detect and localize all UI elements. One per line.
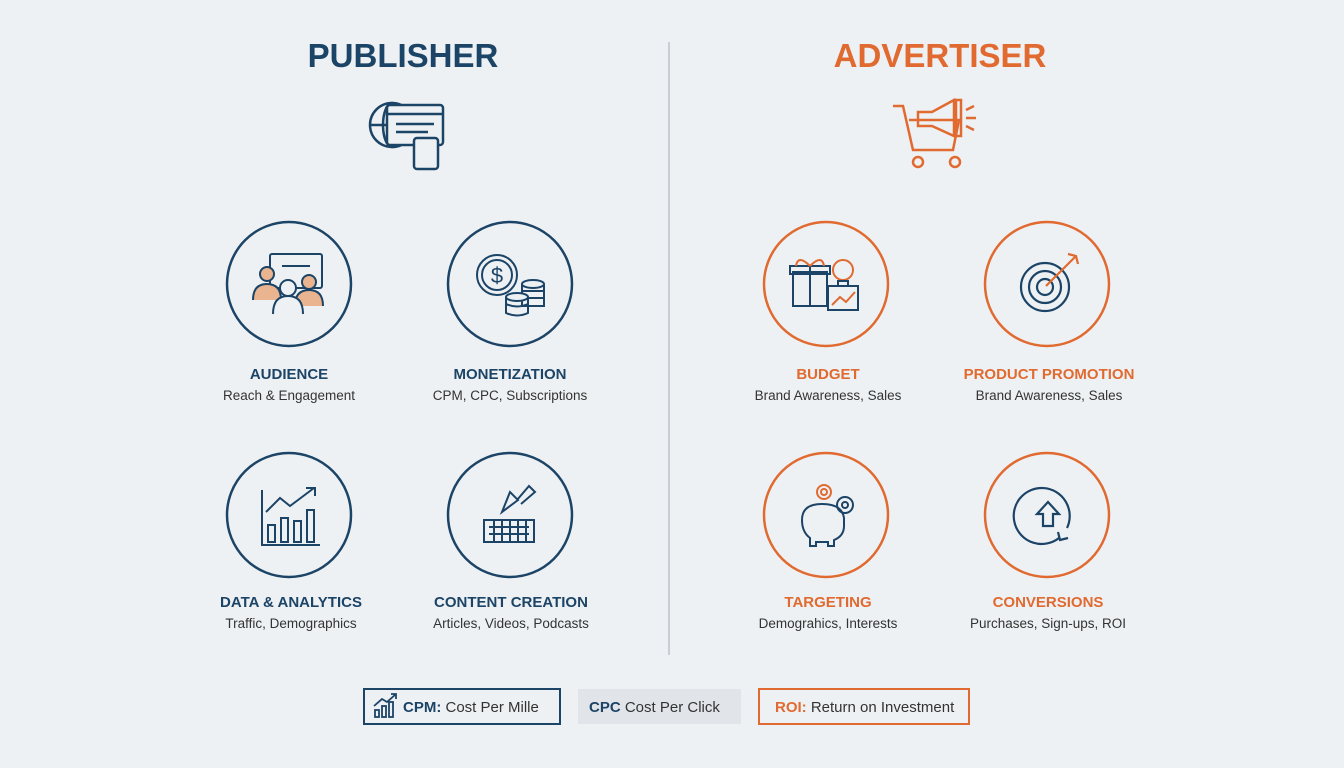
panel: conversions: CONVERSIONS (993, 594, 1103, 611)
icon: advertiser cart megaphone (893, 100, 976, 167)
legend: CPC: CPC Cost Per Click (589, 699, 720, 716)
panel: monetization: CPM, CPC, Subscriptions (433, 388, 588, 403)
panel: targeting (759, 453, 898, 631)
panel: data analytics (220, 453, 362, 631)
legend: CPM (364, 689, 560, 724)
legend: ROI (759, 689, 969, 724)
panel: monetization: $ (491, 263, 503, 288)
icon: publisher globe browser (370, 103, 443, 169)
panel: product promotion: PRODUCT PROMOTION (964, 366, 1134, 383)
panel: targeting: TARGETING (784, 594, 872, 611)
legend: ROI: ROI: Return on Investment (775, 699, 955, 716)
panel: monetization (433, 222, 588, 403)
title: advertiser: ADVERTISER (834, 37, 1047, 74)
panel: data analytics: DATA & ANALYTICS (220, 594, 362, 611)
panel: conversions: Purchases, Sign-ups, ROI (970, 616, 1126, 631)
panel: content creation (433, 453, 589, 631)
panel: budget (755, 222, 902, 403)
panel: audience: AUDIENCE (250, 366, 328, 383)
panel: content creation: CONTENT CREATION (434, 594, 588, 611)
legend: CPC (578, 689, 741, 724)
panel: conversions (970, 453, 1126, 631)
panel: audience (223, 222, 355, 403)
panel: budget: BUDGET (796, 366, 860, 383)
panel: product promotion (964, 222, 1134, 403)
panel: content creation: Articles, Videos, Podcasts (433, 616, 589, 631)
legend: CPM: CPM: Cost Per Mille (403, 699, 539, 716)
panel: product promotion: Brand Awareness, Sales (976, 388, 1123, 403)
panel: data analytics: Traffic, Demographics (225, 616, 357, 631)
panel: monetization: MONETIZATION (453, 366, 567, 383)
title: publisher: PUBLISHER (308, 37, 499, 74)
panel: audience: Reach & Engagement (223, 388, 355, 403)
panel: targeting: Demograhics, Interests (759, 616, 898, 631)
panel: budget: Brand Awareness, Sales (755, 388, 902, 403)
